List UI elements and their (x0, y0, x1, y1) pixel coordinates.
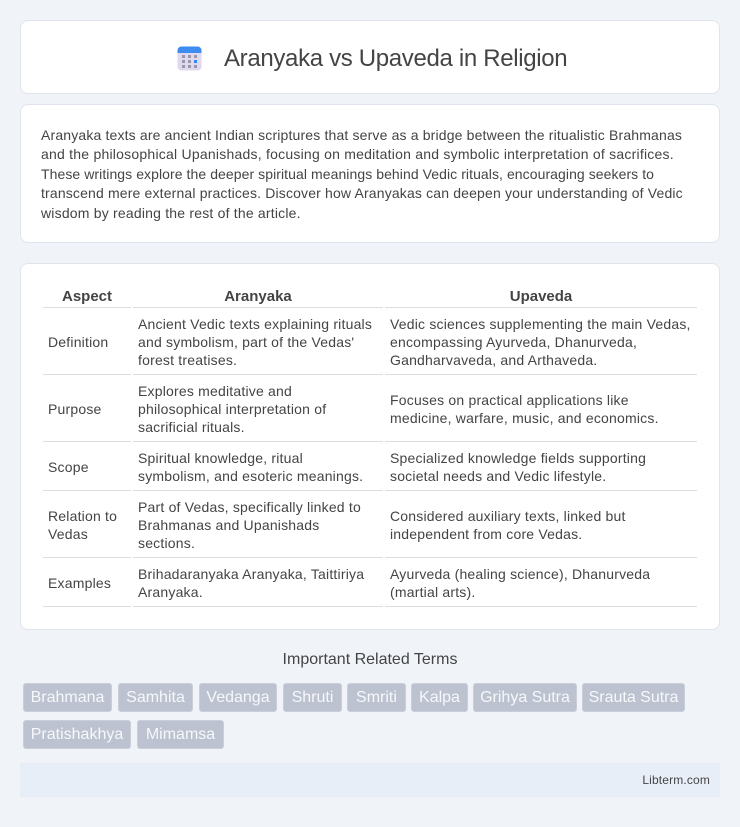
row: scope: Scope (48, 459, 89, 475)
row: examples: (martial arts). (390, 584, 475, 600)
row: relation to vedas: Considered auxiliary texts, linked but (390, 508, 626, 524)
row: relation to vedas: sections. (138, 535, 195, 551)
row: purpose: sacrificial rituals. (138, 419, 245, 435)
icon: calendar (178, 46, 202, 70)
related terms tags: Brahmana (31, 689, 104, 706)
row: definition: forest treatises. (138, 352, 237, 368)
row: examples: Brihadaranyaka Aranyaka, Taittiriya (138, 566, 364, 582)
related terms tags: Mimamsa (146, 726, 215, 743)
row: purpose (48, 383, 659, 435)
row: scope: symbolism, and esoteric meanings. (138, 468, 363, 484)
row: purpose: philosophical interpretation of (138, 401, 326, 417)
row: definition: Ancient Vedic texts explaining rituals (138, 316, 372, 332)
row: relation to vedas (48, 499, 626, 551)
row: scope: Spiritual knowledge, ritual (138, 450, 303, 466)
row: scope: Specialized knowledge fields supporting (390, 450, 646, 466)
row: examples (48, 566, 650, 600)
row: purpose: Purpose (48, 401, 102, 417)
related terms tags (23, 683, 685, 749)
related terms tags: Samhita (126, 689, 185, 706)
row: relation to vedas: Brahmanas and Upanishads (138, 517, 319, 533)
related terms tags: Pratishakhya (31, 726, 123, 743)
related terms tags: Vedanga (206, 689, 270, 706)
row: purpose: Focuses on practical applications like (390, 392, 629, 408)
row: purpose: Explores meditative and (138, 383, 292, 399)
intro text: Aranyaka texts are ancient Indian scriptures that serve as a bridge between the ritualistic Brahmanas (41, 127, 682, 143)
intro panel (20, 104, 720, 243)
row: examples: Examples (48, 575, 111, 591)
row: relation to vedas: Vedas (48, 526, 88, 542)
intro text: wisdom by reading the rest of the article. (41, 205, 301, 221)
row: definition: Vedic sciences supplementing the main Vedas, (390, 316, 691, 332)
row: scope: societal needs and Vedic lifestyle. (390, 468, 606, 484)
row: relation to vedas: independent from core Vedas. (390, 526, 582, 542)
intro text: These writings explore the deeper spiritual meanings behind Vedic rituals, encouraging seekers to (41, 166, 654, 182)
intro text: transcend mere external practices. Discover how Aranyakas can deepen your understanding of Vedic (41, 185, 683, 201)
row: definition (48, 316, 691, 368)
row: purpose: medicine, warfare, music, and economics. (390, 410, 659, 426)
row: definition: Gandharvaveda, and Arthaveda. (390, 352, 597, 368)
intro text: and the philosophical Upanishads, focusing on meditation and symbolic interpretation of sacrifices. (41, 146, 674, 162)
comparison table panel (20, 263, 720, 630)
row: relation to vedas: Part of Vedas, specifically linked to (138, 499, 361, 515)
table header (62, 288, 572, 305)
footer credit: Libterm.com (642, 773, 710, 787)
intro text (41, 127, 683, 221)
table header: Upaveda (510, 288, 572, 305)
table header: Aspect (62, 288, 112, 305)
related terms tags: Kalpa (419, 689, 460, 706)
row: relation to vedas: Relation to (48, 508, 117, 524)
title: Aranyaka vs Upaveda in Religion (224, 45, 567, 72)
header panel (20, 20, 720, 94)
table header: Aranyaka (224, 288, 292, 305)
related terms tags: Shruti (292, 689, 333, 706)
row: definition: and symbolism, part of the Vedas' (138, 334, 354, 350)
related terms heading: Important Related Terms (283, 651, 457, 668)
related terms tags: Srauta Sutra (589, 689, 678, 706)
related terms tags: Grihya Sutra (480, 689, 570, 706)
related terms tags: Smriti (356, 689, 397, 706)
row: scope (48, 450, 646, 484)
row: examples: Ayurveda (healing science), Dhanurveda (390, 566, 650, 582)
row: definition: Definition (48, 334, 108, 350)
row: definition: encompassing Ayurveda, Dhanurveda, (390, 334, 637, 350)
footer bar (20, 763, 720, 797)
row: examples: Aranyaka. (138, 584, 203, 600)
